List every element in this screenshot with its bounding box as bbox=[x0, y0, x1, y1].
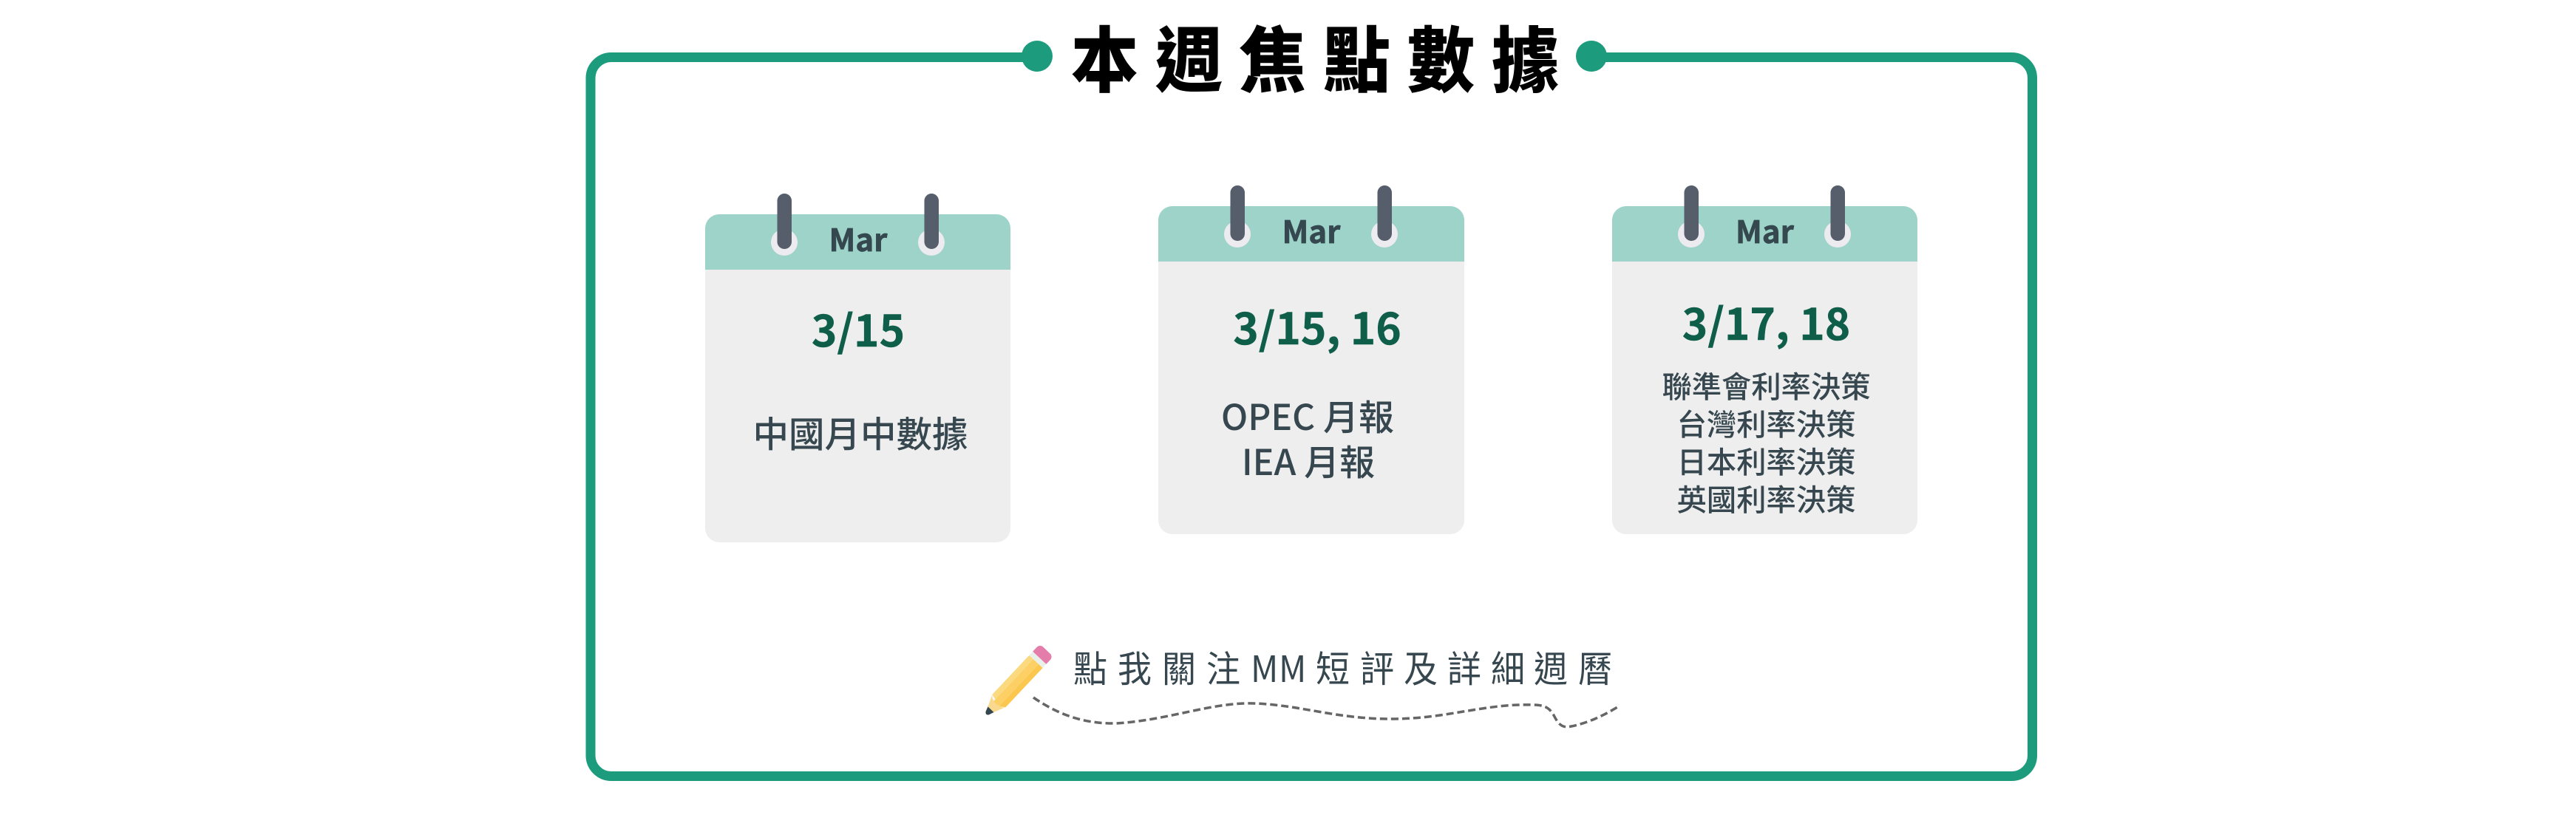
panel: calendar card 3/17, 18 bbox=[1612, 185, 1917, 534]
date: 3/15 bbox=[812, 296, 905, 359]
date: 3/15, 16 bbox=[1233, 294, 1401, 357]
month label: Mar bbox=[1282, 208, 1341, 253]
event text: 日本利率決策 bbox=[1677, 438, 1855, 482]
event text: 英國利率決策 bbox=[1677, 476, 1855, 519]
panel: green rounded frame bbox=[591, 41, 2033, 776]
panel: calendar card 3/15, 16 bbox=[1158, 185, 1464, 534]
event text: IEA 月報 bbox=[1242, 434, 1375, 485]
dashed underline bbox=[1033, 697, 1619, 727]
month label: Mar bbox=[829, 216, 888, 261]
icon: calendar rings bbox=[1678, 185, 1851, 248]
event text bbox=[1221, 389, 1394, 485]
date: 3/17, 18 bbox=[1682, 290, 1850, 352]
month label: Mar bbox=[1736, 208, 1795, 253]
event text bbox=[1662, 363, 1871, 519]
panel: calendar card 3/15 bbox=[705, 194, 1010, 542]
event text: 聯準會利率決策 bbox=[1662, 363, 1871, 406]
icon: pencil bbox=[979, 644, 1053, 720]
icon: calendar rings bbox=[771, 194, 945, 256]
icon: calendar rings bbox=[1224, 185, 1398, 248]
call to action text: 點我關注MM短評及詳細週曆 bbox=[1073, 640, 1612, 692]
event text: OPEC 月報 bbox=[1221, 389, 1394, 440]
event text: 中國月中數據 bbox=[752, 406, 968, 457]
event text: 台灣利率決策 bbox=[1677, 400, 1855, 444]
title: 本週焦點數據 bbox=[1071, 4, 1559, 107]
